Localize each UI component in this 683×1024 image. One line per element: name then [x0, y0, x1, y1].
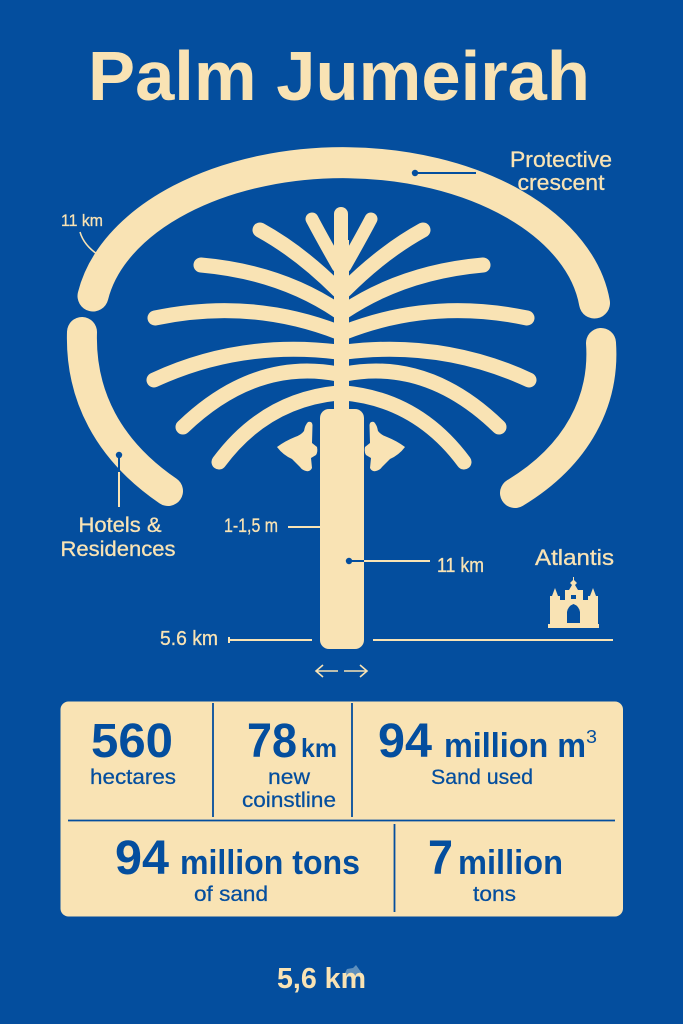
label: Atlantis: Atlantis — [535, 545, 614, 570]
stat: 94 million m3 sand used: 94 — [378, 715, 432, 768]
stat: 560 hectares — [90, 715, 176, 789]
card dividers — [68, 703, 615, 912]
label: 11 km trunk: 11 km — [437, 555, 484, 577]
stat: 94 million m3 sand used: 3 — [586, 727, 597, 747]
label: hotels and residences: Residences — [60, 538, 176, 561]
stat: 560 hectares: 560 — [91, 715, 173, 768]
small island right — [365, 422, 405, 471]
label: 11 km crescent — [61, 211, 103, 256]
stat: 94 million m3 sand used — [378, 715, 597, 789]
palm island map — [82, 163, 601, 649]
protective crescent: top arc — [93, 163, 594, 303]
stat: 78 km new coastline: 78 — [247, 715, 297, 768]
stat: 94 million tons of sand: million tons — [180, 844, 360, 882]
label: hotels and residences: Hotels & — [78, 514, 162, 537]
label: 5.6 km base line: 5.6 km — [160, 628, 218, 650]
label: hotels and residences — [60, 452, 176, 561]
stat: 78 km new coastline — [242, 715, 337, 812]
small island left — [277, 422, 317, 471]
trunk — [320, 409, 364, 649]
label: 1-1,5 m — [224, 516, 320, 537]
footer label: 5,6 km: 5,6 km — [277, 963, 366, 995]
label: 1-1,5 m: 1-1,5 m — [224, 516, 278, 537]
stat: 94 million tons of sand: of sand — [194, 883, 268, 906]
stat: 94 million tons of sand — [115, 832, 360, 906]
stat: 560 hectares: hectares — [90, 766, 176, 789]
stat: 94 million m3 sand used: Sand used — [431, 766, 533, 789]
stat: 7 million tons — [428, 832, 563, 906]
label: protective crescent — [412, 147, 612, 195]
stat: 7 million tons: million — [458, 844, 563, 882]
stat: 78 km new coastline: new — [268, 766, 311, 789]
label: protective crescent: crescent — [518, 170, 604, 195]
icon: Atlantis castle — [548, 577, 599, 628]
label: protective crescent: Protective — [510, 147, 612, 172]
stat: 94 million tons of sand: 94 — [115, 832, 169, 885]
stat: 7 million tons: tons — [473, 883, 516, 906]
palm fronds — [154, 214, 529, 462]
stat: 78 km new coastline: km — [301, 733, 337, 763]
palm spine — [334, 240, 349, 415]
label: 11 km crescent: 11 km — [61, 211, 103, 230]
stat: 7 million tons: 7 — [428, 832, 453, 885]
stat: 78 km new coastline: coinstline — [242, 789, 336, 812]
crescent: lower right arc — [515, 343, 601, 493]
crescent: lower left arc — [82, 332, 168, 491]
stat: 94 million m3 sand used: million m — [444, 727, 586, 765]
label: 11 km trunk — [346, 555, 484, 577]
arrows: width indicator — [316, 665, 367, 677]
title: Palm Jumeirah — [88, 37, 590, 115]
stats card — [60, 702, 623, 916]
